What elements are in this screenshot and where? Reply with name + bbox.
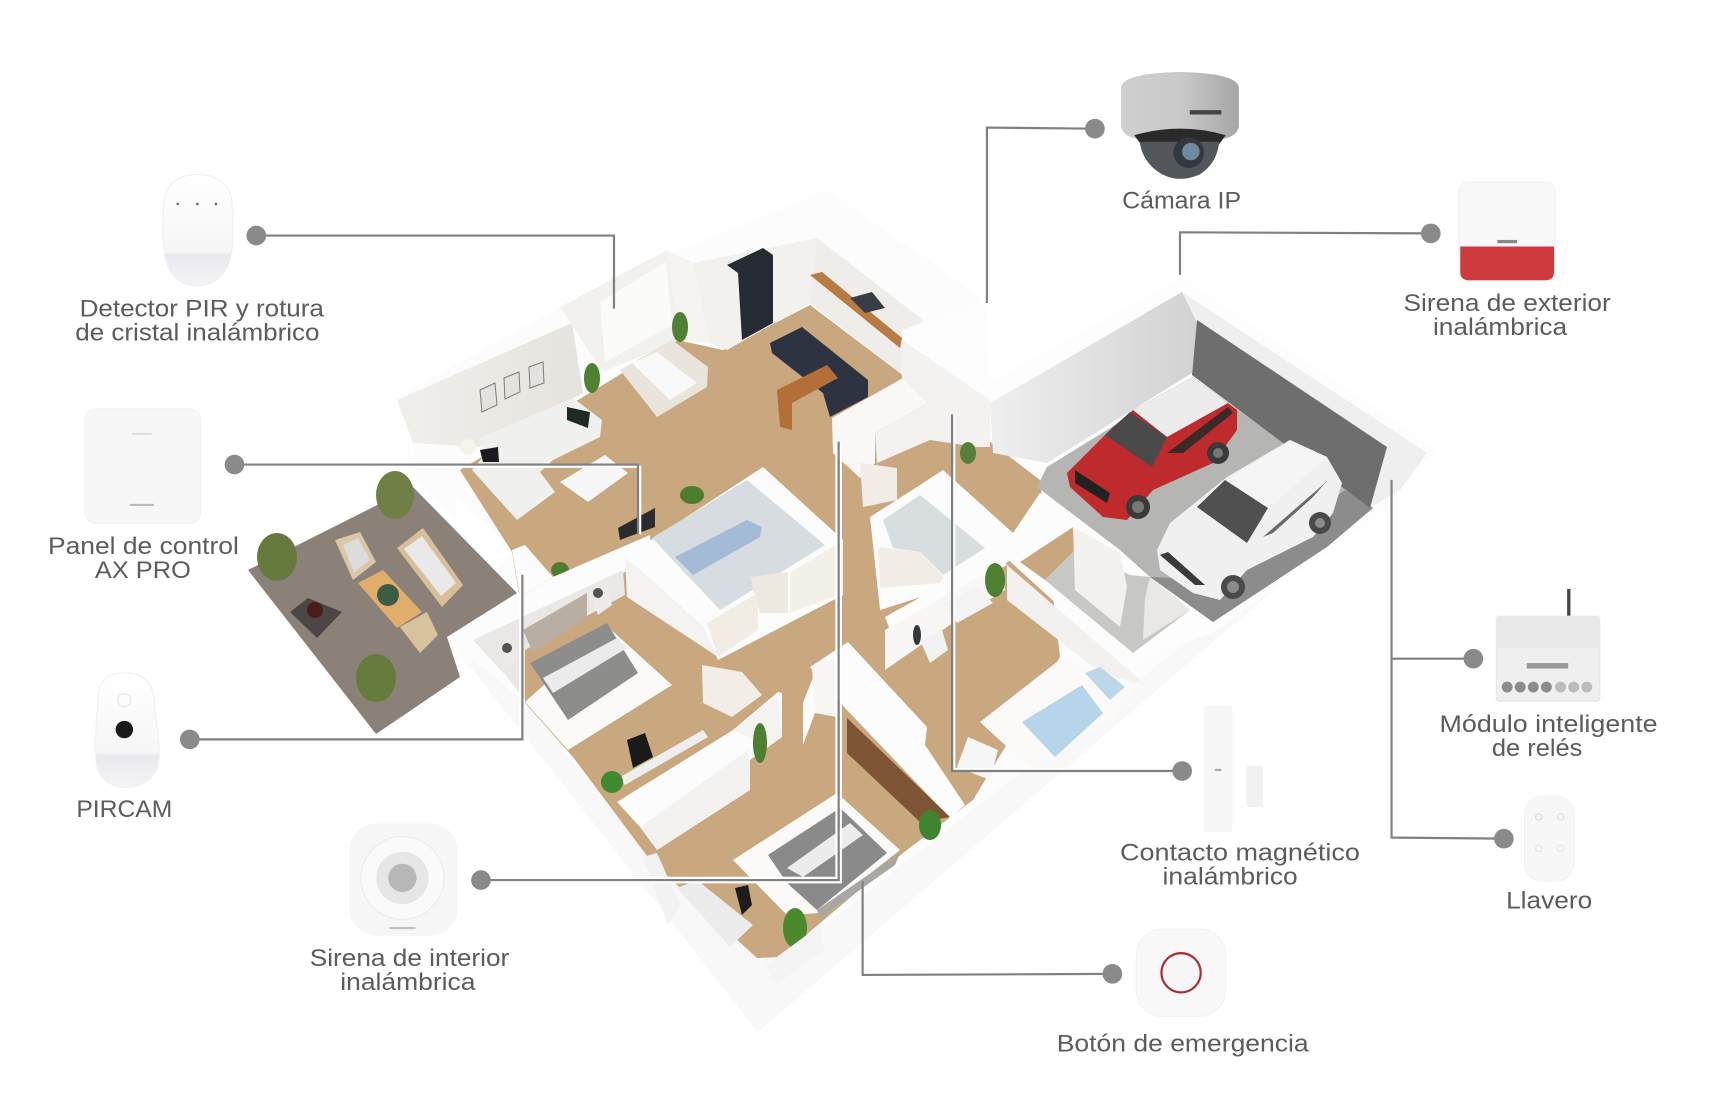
label: outdoor siren [1404, 290, 1611, 341]
label: magnetic contact: Contacto magnético [1120, 839, 1360, 866]
bathroom [625, 467, 843, 660]
label: PIR detector: Detector PIR y rotura [80, 295, 325, 322]
patio [248, 471, 517, 734]
living room wall [397, 323, 583, 523]
device: relay module [1496, 589, 1600, 701]
dining table [620, 340, 708, 417]
connector: magnetic contact [952, 414, 1192, 781]
label: outdoor siren: inalámbrica [1433, 314, 1568, 341]
label: indoor siren: inalámbrica [340, 969, 476, 996]
entry hall [832, 300, 992, 507]
label: relay module: de relés [1492, 735, 1582, 762]
device: emergency button [1136, 929, 1226, 1016]
connector: relay module and key fob [1392, 480, 1514, 848]
connector: IP camera [987, 119, 1105, 303]
label: magnetic contact: inalámbrico [1163, 863, 1298, 890]
floor plan of the house [248, 190, 1437, 1032]
device: magnetic contact [1204, 706, 1263, 832]
label: PIR detector: de cristal inalámbrico [75, 319, 320, 346]
label: PIR detector [75, 295, 325, 346]
small bathroom [870, 470, 1077, 610]
connector: outdoor siren [1180, 224, 1441, 275]
connector: control panel [225, 455, 640, 534]
device: IP camera [1121, 72, 1239, 179]
red car [1067, 377, 1237, 520]
living room sofa [460, 398, 628, 520]
bedroom with blue bed [885, 545, 1150, 780]
window wall [560, 250, 710, 372]
device: outdoor siren [1459, 182, 1555, 280]
wood floor [460, 305, 1060, 958]
white car [1157, 440, 1342, 600]
connector: PIRCAM [180, 575, 522, 749]
connector: emergency button [863, 881, 1122, 984]
label: control panel [48, 533, 239, 584]
connector: indoor siren [471, 442, 841, 890]
bedroom one [447, 535, 672, 750]
central cabinet wall [601, 665, 782, 850]
connector: PIR detector [246, 226, 614, 309]
kitchen island [770, 327, 868, 430]
device: PIR detector [163, 174, 233, 286]
device: control panel [85, 409, 201, 523]
label: key fob: Llavero [1506, 887, 1592, 914]
label: control panel: Panel de control [48, 533, 239, 560]
device: PIRCAM [96, 673, 159, 787]
garage [985, 277, 1437, 665]
lower wall with bookcase [803, 642, 965, 840]
label: PIRCAM: PIRCAM [76, 796, 172, 823]
label: IP camera: Cámara IP [1122, 187, 1241, 214]
label: outdoor siren: Sirena de exterior [1404, 290, 1611, 317]
lower bedroom [643, 793, 900, 985]
label: control panel: AX PRO [95, 557, 191, 584]
label: indoor siren: Sirena de interior [310, 945, 509, 972]
patio door chair and plants [551, 312, 704, 578]
device: indoor siren [349, 823, 458, 936]
label: magnetic contact [1120, 839, 1360, 890]
label: relay module [1440, 711, 1658, 762]
label: indoor siren [310, 945, 509, 996]
kitchen walls [680, 202, 953, 373]
device: key fob [1525, 796, 1574, 881]
outer walls [395, 190, 1437, 1032]
label: emergency button: Botón de emergencia [1057, 1030, 1309, 1057]
label: relay module: Módulo inteligente [1440, 711, 1658, 738]
